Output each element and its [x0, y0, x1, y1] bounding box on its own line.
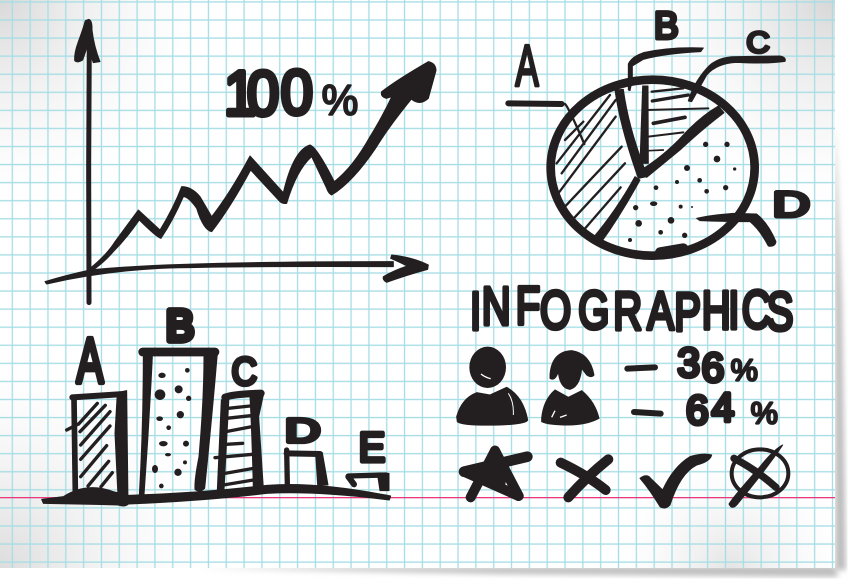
label: D: D: [773, 186, 810, 225]
bar B: [139, 352, 217, 495]
callout A line: [508, 103, 584, 144]
dash: woman share: [634, 412, 661, 414]
icon: woman: [542, 351, 599, 425]
value: 64%: 64%: [686, 385, 778, 433]
label: C: C: [232, 350, 257, 393]
title: INFOGRAPHICS: [470, 275, 793, 342]
label: 100%: 100: [224, 57, 313, 129]
icon: man: [457, 347, 528, 425]
label: E: E: [359, 424, 385, 470]
icon: cross: [561, 459, 608, 497]
label: D: D: [285, 413, 320, 450]
pie chart: [508, 5, 810, 256]
y axis arrow: [75, 19, 100, 303]
label: percent sign: %: [322, 77, 358, 125]
page shadow: [200, 120, 846, 577]
slice D dots: [628, 142, 736, 242]
bar A: [67, 391, 128, 503]
callout D line: [697, 204, 776, 246]
label: C: C: [746, 26, 770, 59]
label: B: B: [166, 303, 194, 351]
label: A: A: [77, 326, 104, 396]
chart baseline: [42, 484, 391, 506]
label: B: B: [654, 5, 679, 48]
bar C: [215, 393, 263, 490]
slice C hatching: [647, 88, 708, 151]
dash: man share: [627, 367, 655, 369]
infographics panel: [457, 275, 793, 508]
icon: star: [464, 451, 527, 497]
icon: check mark: [640, 454, 712, 508]
rising trend line with arrow: [90, 62, 436, 272]
x axis arrow: [45, 255, 428, 284]
bar D: [287, 450, 328, 485]
bar chart: [42, 303, 391, 506]
pie outline: [551, 80, 755, 256]
value: 36%: 36%: [677, 340, 758, 391]
slice A hatching: [557, 95, 625, 232]
icon: crossed circle: [729, 445, 788, 507]
bar E: [348, 473, 389, 491]
callout C line: [688, 56, 785, 102]
label: A: A: [515, 34, 539, 99]
line chart: [45, 19, 436, 303]
pie slice dividers: [593, 86, 724, 252]
callout B line: [628, 48, 703, 91]
